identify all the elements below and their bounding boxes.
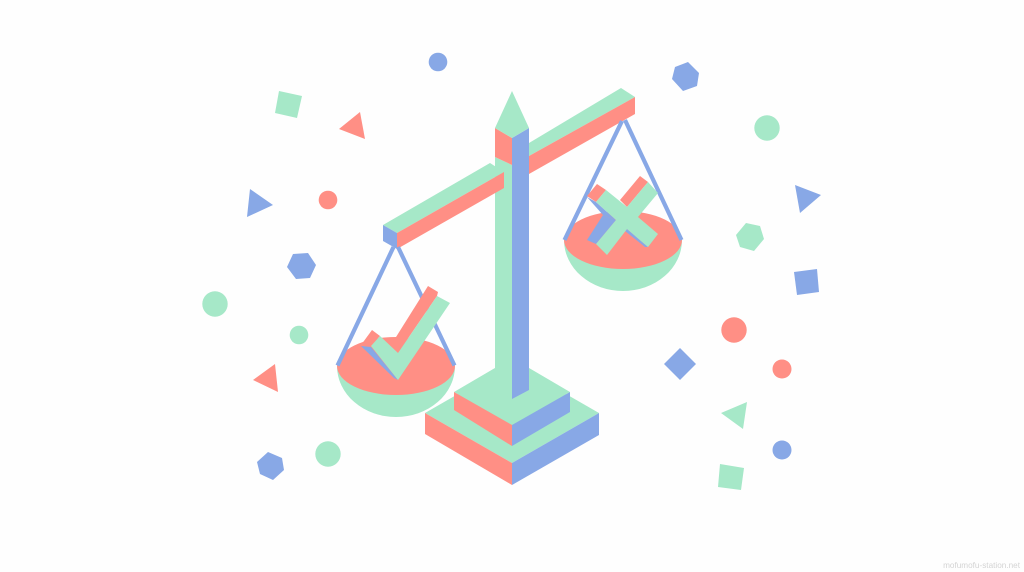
bowl	[564, 240, 682, 291]
lower step	[425, 363, 599, 485]
hanging cords	[564, 120, 682, 240]
blue triangle	[795, 185, 821, 213]
red circle	[319, 191, 337, 209]
green hexagon	[736, 223, 764, 251]
bowl	[337, 366, 455, 417]
left beam arm	[383, 163, 504, 249]
scale base	[425, 358, 599, 485]
blue diamond	[664, 348, 696, 380]
column pointed tip	[495, 91, 529, 138]
blue hexagon lower	[257, 452, 284, 480]
blue square	[794, 269, 819, 295]
check mark	[361, 286, 450, 380]
column blue face	[512, 128, 529, 399]
central column	[495, 91, 529, 399]
green square	[275, 91, 302, 118]
watermark: mofumofu-station.net	[943, 561, 1021, 570]
red circle large	[721, 317, 747, 343]
bowl top	[564, 211, 682, 269]
cross mark	[587, 176, 658, 255]
left pan with check mark	[337, 247, 455, 417]
green square	[718, 464, 744, 490]
blue circle	[429, 53, 447, 71]
red triangle	[339, 112, 365, 139]
hanging cords	[338, 247, 454, 366]
bowl top	[337, 337, 455, 395]
blue hexagon	[287, 253, 316, 279]
blue circle	[772, 440, 792, 460]
confetti shapes: left side	[202, 53, 447, 480]
green circle	[754, 115, 780, 141]
blue hexagon	[672, 62, 699, 91]
confetti shapes: right side	[664, 62, 821, 490]
small green circle	[290, 326, 308, 344]
green triangle	[721, 402, 747, 429]
green circle lower	[315, 441, 341, 467]
column green face	[495, 157, 512, 399]
red circle small	[772, 360, 792, 378]
column red cap face	[495, 128, 512, 165]
large green circle	[202, 291, 228, 317]
blue triangle	[247, 189, 273, 217]
upper step	[454, 358, 570, 446]
right beam arm	[529, 88, 635, 174]
red triangle lower	[253, 364, 278, 392]
right pan with cross mark	[564, 120, 682, 291]
